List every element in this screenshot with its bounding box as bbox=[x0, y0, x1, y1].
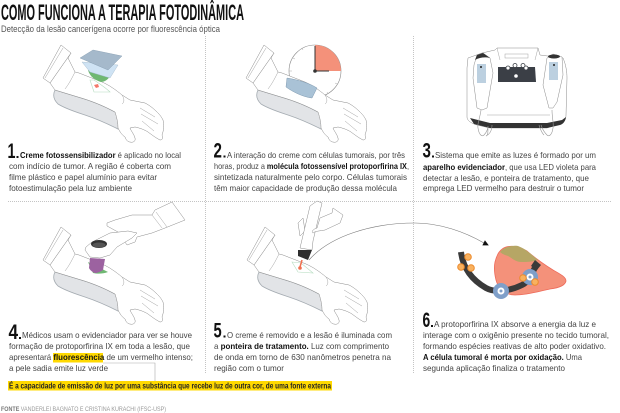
step number 4: 4 bbox=[8, 322, 18, 344]
illustration: arm with film and foil bbox=[43, 45, 164, 142]
text block 2 bbox=[214, 151, 409, 193]
callout: definition of fluorescence: É a capacidade de emissão de luz por uma substância que recebe luz de outra cor, de uma fonte externa bbox=[9, 382, 332, 390]
text block 6: A protoporfirina IX absorve a energia da luz e bbox=[434, 320, 596, 329]
text block 2: sintetizada naturalmente pelo corpo. Células tumorais bbox=[214, 173, 407, 182]
text block 2: A interação do creme com células tumorais, por três bbox=[227, 151, 405, 160]
text block 1: filme plástico e papel alumínio para evitar bbox=[9, 173, 157, 182]
step number 5 bbox=[214, 319, 226, 342]
highlighted word bbox=[53, 353, 103, 362]
icon: treatment pointer bbox=[298, 201, 343, 260]
panel: step 6 bbox=[422, 246, 609, 373]
text block 5: a ponteira de tratamento. Luz com comprimento bbox=[214, 342, 389, 351]
text block 5: O creme é removido e a lesão é iluminada com bbox=[227, 331, 392, 340]
illustration: arm with treatment pointer bbox=[247, 201, 368, 324]
text block 3: emprega LED vermelho para destruir o tumor bbox=[423, 184, 584, 193]
arrow: from pointer to tissue detail bbox=[309, 223, 488, 260]
text block 1 bbox=[9, 151, 181, 193]
text block 6: formando espécies reativas de alto poder oxidativo. bbox=[423, 342, 606, 351]
text block 1: Creme fotossensibilizador é aplicado no local bbox=[20, 151, 181, 160]
illustration: arm with evidencing device bbox=[43, 202, 185, 324]
source line: FONTE VANDERLEI BAGNATO E CRISTINA KURACHI (IFSC-USP) bbox=[1, 406, 166, 413]
text block 5 bbox=[214, 331, 392, 373]
panel: step 3 bbox=[422, 48, 596, 193]
illustration: device with two handpieces bbox=[467, 48, 567, 136]
text block 5: região com o tumor bbox=[214, 364, 284, 373]
text block 3: detectar a lesão, e ponteira de tratamento, que bbox=[423, 174, 589, 183]
tumor tissue bbox=[494, 246, 566, 295]
text block 1: com indício de tumor. A região é coberta com bbox=[9, 162, 171, 171]
icon: clock bbox=[289, 45, 341, 97]
text block 5: de onda em torno de 630 nanômetros penetra na bbox=[214, 353, 391, 362]
subtitle: Detecção da lesão cancerígena ocorre por fluorescência óptica bbox=[1, 24, 220, 34]
text block 4: formação de protoporfirina IX em toda a lesão, que bbox=[9, 342, 190, 351]
text block 4: a pele sadia emite luz verde bbox=[9, 364, 108, 373]
step number 1: 1 bbox=[8, 139, 15, 163]
icon: left handpiece bbox=[473, 53, 493, 110]
step number 6: 6 bbox=[422, 308, 430, 332]
text block 2: horas, produz a molécula fotossensível protoporfirina IX, bbox=[214, 162, 409, 171]
text block 4: Médicos usam o evidenciador para ver se houve bbox=[22, 331, 192, 340]
text block 3: aparelho evidenciador, que usa LED violeta para bbox=[423, 163, 596, 172]
panel: step 5 bbox=[214, 201, 392, 373]
illustration: tumor cell oxidation bbox=[458, 246, 566, 299]
cell nuclei bbox=[493, 269, 538, 299]
icon: right handpiece bbox=[543, 54, 563, 108]
text block 4: apresentará fluorescência de um vermelho intenso; bbox=[9, 353, 193, 362]
text block 3: Sistema que emite as luzes é formado por um bbox=[435, 151, 596, 160]
text block 2: têm maior capacidade de produção dessa molécula bbox=[214, 184, 397, 193]
panel: step 4 bbox=[8, 202, 193, 381]
oxygen molecules bbox=[458, 254, 538, 285]
step number 3: 3 bbox=[422, 138, 431, 162]
text block 1: fotoestimulação pela luz ambiente bbox=[9, 184, 132, 193]
step number 2: 2 bbox=[214, 138, 222, 162]
infographic canvas: COMO FUNCIONA A TERAPIA FOTODINÂMICA bbox=[1, 0, 244, 25]
text block 4 bbox=[9, 331, 193, 373]
text block 6 bbox=[423, 320, 609, 373]
text block 6: A célula tumoral é morta por oxidação. Uma bbox=[423, 353, 582, 362]
text block 6: interage com o oxigênio presente no tecido tumoral, bbox=[423, 331, 609, 340]
text block 3 bbox=[423, 151, 596, 193]
panel: step 1 bbox=[8, 45, 181, 193]
text block 6: segunda aplicação finaliza o tratamento bbox=[423, 364, 565, 373]
protoporphyrin chain bbox=[461, 252, 536, 291]
illustration: arm with three-hour clock bbox=[246, 45, 367, 142]
panel: step 2 bbox=[214, 45, 409, 193]
step number 5: 5 bbox=[214, 319, 222, 342]
icon: hand holding device bbox=[85, 202, 185, 258]
